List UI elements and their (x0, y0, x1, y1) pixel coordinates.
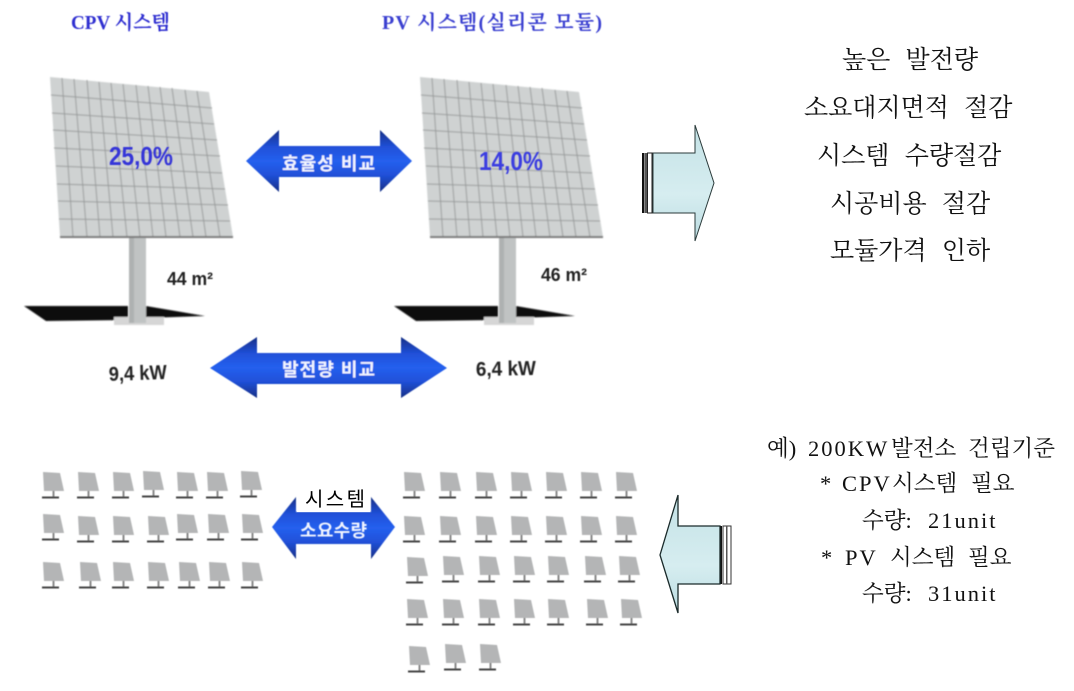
PV area label: 46 m² (541, 265, 587, 285)
example text: 200KW plant: 필요 (971, 471, 1015, 496)
example text: 200KW plant: 200KW (808, 436, 889, 461)
heading: PV system (silicon module): PV 시스템(실리콘 모듈) (382, 10, 602, 34)
arrow: required quantity (272, 488, 395, 559)
example text: 200KW plant (767, 436, 1055, 606)
benefits list (804, 46, 1013, 265)
example text: 200KW plant: PV (845, 545, 878, 570)
PV system array: 31 units (403, 472, 642, 672)
benefits list: 소요대지면적 절감 (804, 94, 1013, 122)
PV power value: 6,4 kW (476, 358, 536, 381)
example text: 200KW plant: 31unit (928, 581, 998, 606)
arrow: to conclusions (642, 125, 714, 241)
CPV efficiency value: 25,0% (109, 141, 173, 171)
example text: 200KW plant: 필요 (968, 545, 1012, 570)
benefits list: 높은 발전량 (842, 46, 979, 74)
heading: CPV system: CPV 시스템 (71, 10, 170, 34)
example text: 200KW plant: 건립기준 (968, 436, 1055, 461)
PV solar tracker (394, 77, 603, 325)
example text: 200KW plant: * (820, 471, 831, 496)
example text: 200KW plant: 21unit (928, 508, 998, 533)
arrow: efficiency comparison: 효율성 비교 (282, 154, 375, 174)
arrow: power output comparison (210, 337, 447, 398)
benefits list: 시공비용 절감 (830, 190, 991, 218)
example text: 200KW plant: * (821, 545, 832, 570)
arrow: required quantity: 소요수량 (300, 521, 367, 541)
arrow: required quantity: 시스템 (305, 488, 365, 511)
example text: 200KW plant: CPV (842, 471, 892, 496)
example text: 200KW plant: 발전소 (891, 436, 956, 461)
example text: 200KW plant: 수량: (862, 581, 912, 606)
arrow: power output comparison: 발전량 비교 (282, 360, 375, 380)
CPV system array: 21 units (42, 471, 263, 588)
benefits list: 모듈가격 인하 (830, 237, 991, 265)
example text: 200KW plant: 수량: (862, 508, 912, 533)
CPV solar tracker (24, 77, 233, 325)
arrow: from example (660, 495, 731, 613)
arrow: efficiency comparison (246, 130, 412, 192)
benefits list: 시스템 수량절감 (817, 142, 1002, 170)
example text: 200KW plant: 예) (767, 436, 796, 461)
example text: 200KW plant: 시스템 (892, 471, 957, 496)
example text: 200KW plant: 시스템 (890, 545, 955, 570)
PV efficiency value: 14,0% (479, 146, 543, 176)
CPV power value: 9,4 kW (108, 362, 167, 386)
CPV area label: 44 m² (167, 269, 213, 289)
